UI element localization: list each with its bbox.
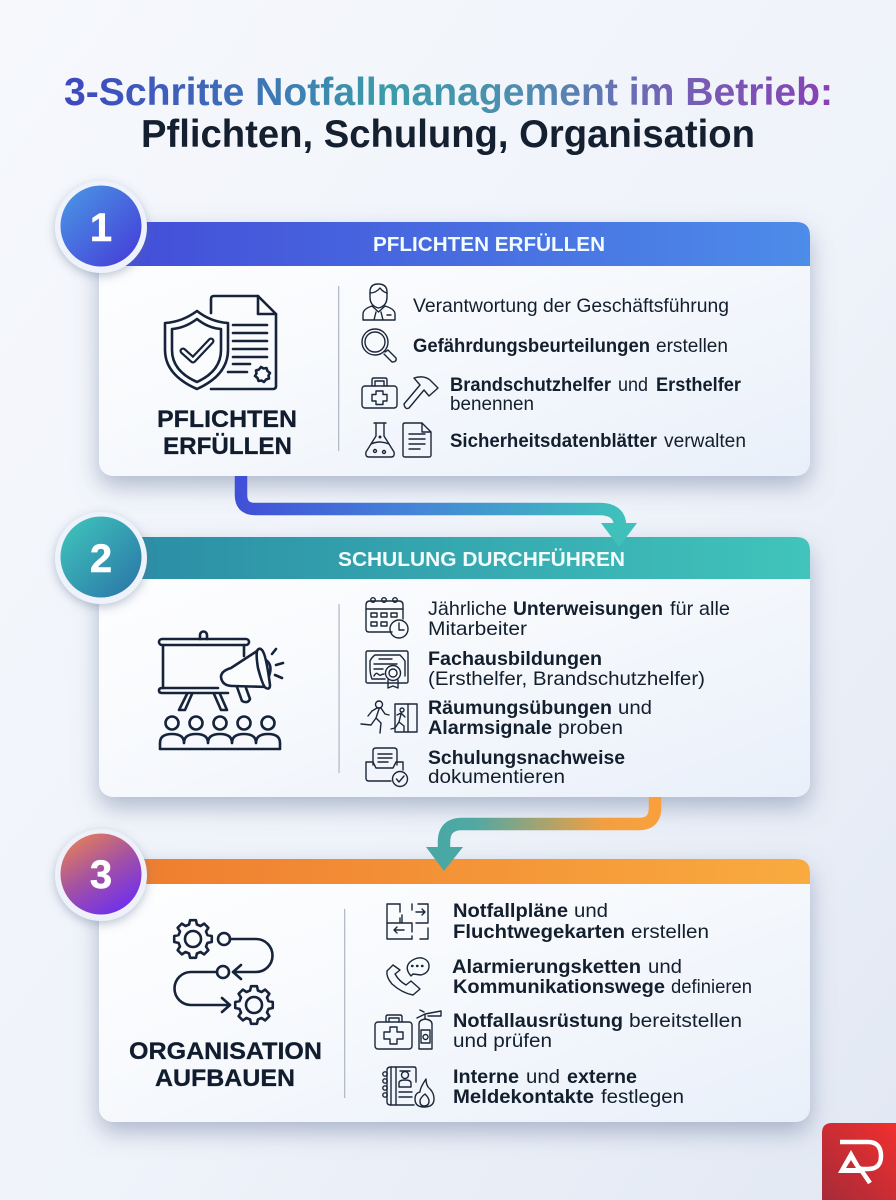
card 1 header bar xyxy=(99,222,810,266)
left label: Organisation aufbauen: ORGANISATION xyxy=(129,1038,322,1065)
title: Pflichten, Schulung, Organisation xyxy=(141,113,755,156)
left label: Organisation aufbauen: AUFBAUEN xyxy=(155,1065,295,1092)
icon: magnifier xyxy=(362,329,396,362)
item: Brandschutzhelfer und Ersthelfer benennen xyxy=(450,374,741,415)
item: Schulungsnachweise: dokumentieren xyxy=(428,766,565,788)
item: Interne und externe Meldekontakte: und xyxy=(526,1066,560,1088)
item: Alarmierungsketten: und xyxy=(648,956,682,978)
left label: Pflichten erfüllen: PFLICHTEN xyxy=(157,406,297,433)
item: Sicherheitsdatenblätter verwalten: verwalten xyxy=(664,430,746,452)
icon: calendar with clock xyxy=(366,598,408,638)
item: Räumungsübungen und Alarmsignale: und xyxy=(618,697,652,719)
arrow: step 1 to step 2 xyxy=(241,476,637,547)
icon: manager xyxy=(363,284,395,320)
card 2 background xyxy=(99,537,810,797)
item: Schulungsnachweise: Schulungsnachweise xyxy=(428,747,625,769)
item: Räumungsübungen und Alarmsignale xyxy=(428,697,652,739)
item: Gefährdungsbeurteilungen: Gefährdungsbeurteilungen xyxy=(413,335,650,357)
item: Interne und externe Meldekontakte xyxy=(453,1066,684,1108)
item: Interne und externe Meldekontakte: Interne xyxy=(453,1066,519,1088)
item: Räumungsübungen und Alarmsignale: Räumungsübungen xyxy=(428,697,612,719)
item: Notfallpläne: Notfallpläne xyxy=(453,900,568,922)
logo: AR mark xyxy=(822,1123,896,1200)
icon: document tray with check xyxy=(366,748,408,786)
step number 2: 2 xyxy=(90,537,112,581)
item: Jährliche Unterweisungen xyxy=(428,598,730,640)
icon: phone and speech bubble xyxy=(387,958,429,995)
item: Notfallpläne xyxy=(453,900,709,943)
item: Verantwortung: Verantwortung der Geschäftsführung xyxy=(413,295,729,317)
item: Notfallausrüstung: und prüfen xyxy=(453,1030,552,1052)
icon: first aid kit and extinguisher xyxy=(375,1010,441,1049)
item: Notfallausrüstung xyxy=(453,1010,742,1052)
title: 3-Schritte Notfallmanagement im Betrieb: xyxy=(64,71,833,114)
icon: presentation with megaphone and audience xyxy=(159,632,283,749)
icon: process flow with gears xyxy=(174,920,273,1024)
item: Brandschutzhelfer und Ersthelfer benennen: Ersthelfer xyxy=(656,374,741,396)
icon: first aid kit and hammer xyxy=(362,377,438,408)
item: Jährliche Unterweisungen: Mitarbeiter xyxy=(428,618,528,640)
card 1 header text: PFLICHTEN ERFÜLLEN xyxy=(373,233,605,256)
item: Notfallpläne: Fluchtwegekarten xyxy=(453,921,625,943)
item: Notfallausrüstung: Notfallausrüstung xyxy=(453,1010,623,1032)
card 2 header text: SCHULUNG DURCHFÜHREN xyxy=(338,548,625,571)
icon: certificate xyxy=(366,651,408,688)
item: Sicherheitsdatenblätter verwalten: Sicherheitsdatenblätter xyxy=(450,430,657,452)
item: Alarmierungsketten: Alarmierungsketten xyxy=(452,956,641,978)
arrow: step 2 to step 3 xyxy=(426,797,655,871)
item: Notfallpläne: und xyxy=(574,900,608,922)
left label: Pflichten erfüllen: ERFÜLLEN xyxy=(163,433,292,460)
item: Jährliche Unterweisungen: Unterweisungen xyxy=(513,598,663,620)
card 3 background xyxy=(99,859,810,1122)
card 3 header bar xyxy=(99,859,810,884)
step number 2 xyxy=(55,512,147,604)
left label: Pflichten erfüllen xyxy=(157,406,297,460)
item: Notfallausrüstung: bereitstellen xyxy=(629,1010,742,1032)
icon: shield and document xyxy=(165,296,276,389)
item: Interne und externe Meldekontakte: Meldekontakte xyxy=(453,1086,594,1108)
item: Räumungsübungen und Alarmsignale: proben xyxy=(558,717,623,739)
item: Brandschutzhelfer und Ersthelfer benennen: Brandschutzhelfer xyxy=(450,374,611,396)
item: Alarmierungsketten xyxy=(452,956,752,998)
item: Fachausbildungen: (Ersthelfer, Brandschutzhelfer) xyxy=(428,668,705,690)
item: Interne und externe Meldekontakte: externe xyxy=(567,1066,637,1088)
panel: step 2 Schulung durchführen xyxy=(99,537,810,797)
item: Schulungsnachweise xyxy=(428,747,625,788)
item: Gefährdungsbeurteilungen: erstellen xyxy=(656,335,728,357)
icon: running person and exit door xyxy=(361,701,417,733)
step number 3 xyxy=(55,829,147,921)
icon: floor plan xyxy=(387,904,428,939)
item: Fachausbildungen xyxy=(428,648,705,690)
card 2 header bar xyxy=(99,537,810,579)
step number 1 xyxy=(55,181,147,273)
item: Brandschutzhelfer und Ersthelfer benennen: benennen xyxy=(450,393,534,415)
panel: step 1 Pflichten erfüllen xyxy=(99,222,810,476)
left label: Organisation aufbauen xyxy=(129,1038,322,1092)
item: Alarmierungsketten: Kommunikationswege xyxy=(453,976,665,998)
card 1 background xyxy=(99,222,810,476)
title xyxy=(64,71,833,156)
step number 3: 3 xyxy=(90,853,112,897)
item: Interne und externe Meldekontakte: festlegen xyxy=(601,1086,684,1108)
item: Jährliche Unterweisungen: für alle xyxy=(670,598,730,620)
item: Räumungsübungen und Alarmsignale: Alarmsignale xyxy=(428,717,552,739)
panel: step 3 Organisation aufbauen xyxy=(99,859,810,1122)
item: Notfallpläne: erstellen xyxy=(631,921,709,943)
item: Brandschutzhelfer und Ersthelfer benennen: und xyxy=(618,374,648,396)
icon: contact book and fire xyxy=(383,1067,434,1107)
item: Alarmierungsketten: definieren xyxy=(671,976,752,998)
icon: flask and document xyxy=(366,423,431,457)
step number 1: 1 xyxy=(90,206,112,250)
item: Fachausbildungen: Fachausbildungen xyxy=(428,648,602,670)
item: Jährliche Unterweisungen: Jährliche xyxy=(428,598,507,620)
